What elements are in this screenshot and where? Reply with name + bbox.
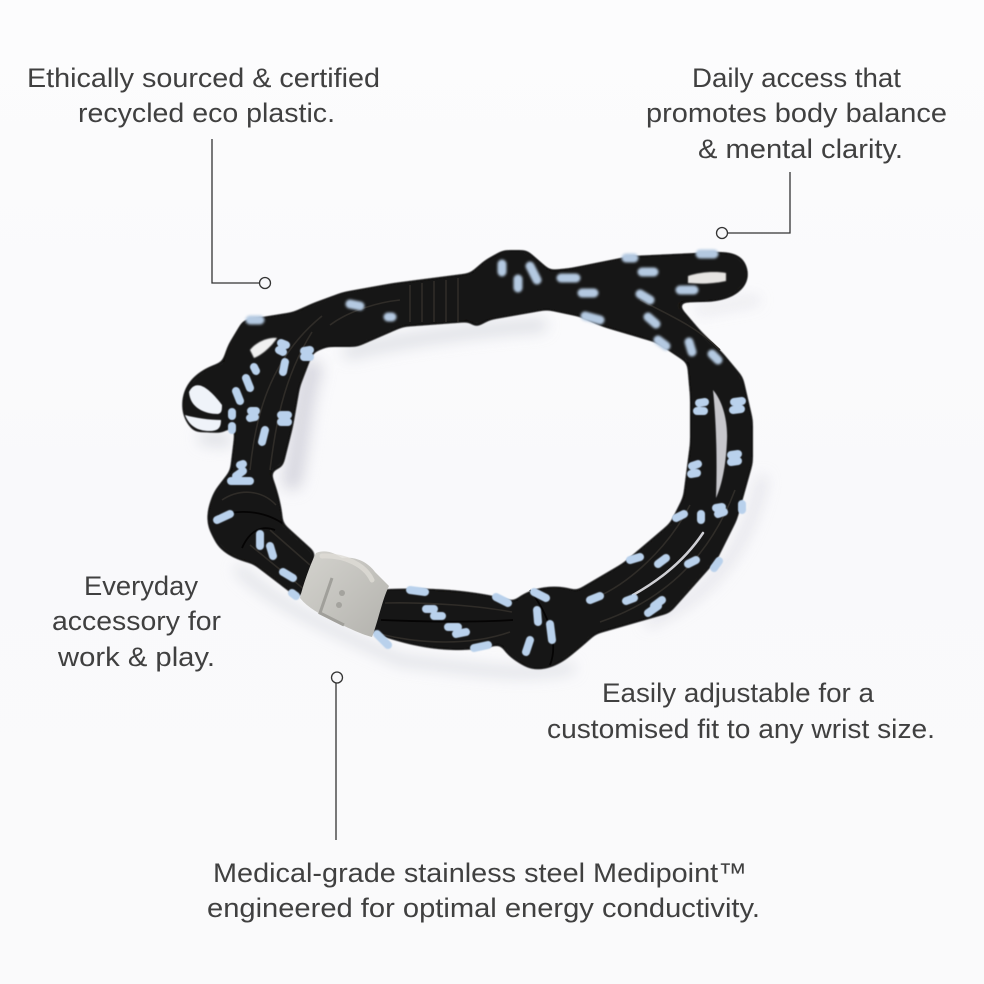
text: recycled eco plastic: recycled eco plastic. <box>78 98 335 128</box>
text: medical-grade steel <box>207 858 760 923</box>
text: medical-grade steel: engineered for optimal energy conductivity. <box>207 893 760 923</box>
left end knot <box>182 362 240 433</box>
text: body balance <box>646 63 947 164</box>
text: medical-grade steel: Medical-grade stainless steel Medipoint™ <box>213 858 747 888</box>
right side <box>697 401 742 411</box>
left strands <box>279 343 310 372</box>
leader line <box>332 672 342 840</box>
callout: medical-grade steel <box>207 672 760 923</box>
gaps between strands <box>713 390 727 498</box>
bracelet photo <box>182 250 762 672</box>
centre strands <box>365 589 520 650</box>
text: body balance: Daily access that <box>692 63 901 93</box>
black cord body <box>182 250 753 670</box>
blue speckles <box>217 343 742 652</box>
callout: everyday accessory: Everyday <box>84 571 198 601</box>
callout: adjustable fit: Easily adjustable for a <box>602 678 875 708</box>
callout: everyday accessory: work & play. <box>57 642 215 672</box>
callout: adjustable fit: customised fit to any wrist size. <box>547 714 935 744</box>
text: recycled eco plastic: Ethically sourced & certified <box>27 63 380 93</box>
leader line <box>716 172 790 238</box>
centre strands <box>377 590 508 648</box>
callout: everyday accessory <box>52 571 221 672</box>
blurred blue speckles, upper band <box>250 254 718 360</box>
white end blob <box>185 385 222 431</box>
callout: everyday accessory: accessory for <box>52 606 221 636</box>
left knot <box>217 464 250 520</box>
right knot <box>500 586 600 670</box>
leader line <box>212 139 270 288</box>
callout: adjustable fit <box>547 678 935 744</box>
shadow under bracelet <box>205 300 762 672</box>
text: recycled eco plastic <box>27 63 380 128</box>
left knot and cord to pendant <box>207 468 316 600</box>
top band and left strands <box>222 250 753 636</box>
callout: recycled eco plastic <box>27 63 380 288</box>
text: body balance: & mental clarity. <box>698 134 903 164</box>
right knot <box>526 592 552 652</box>
stainless steel Medipoint <box>300 551 389 637</box>
text: body balance: promotes body balance <box>646 98 947 128</box>
callout: body balance <box>646 63 947 238</box>
strand texture lines <box>222 278 735 642</box>
